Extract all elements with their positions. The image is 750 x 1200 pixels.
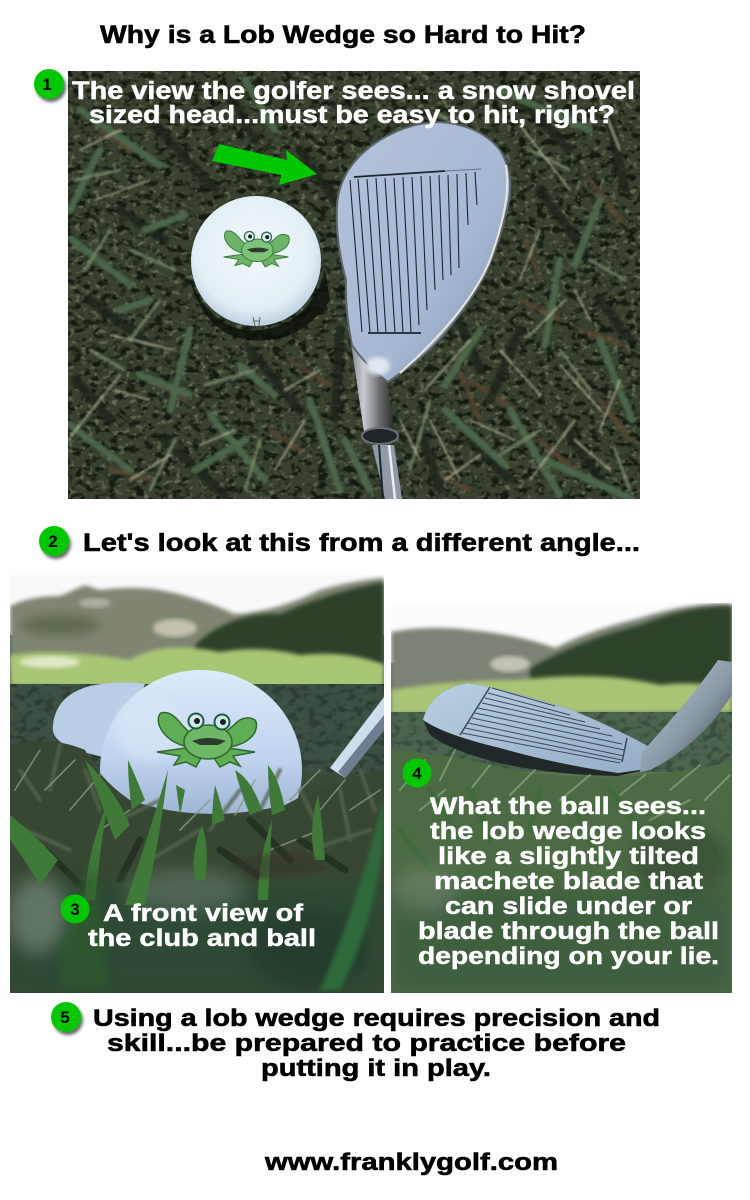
badge 2: [39, 526, 69, 556]
heading: different angle: Let's look at this from a different angle...: [83, 529, 640, 557]
badge 1: [34, 69, 64, 99]
frog logo: [224, 231, 289, 267]
sharp blades: [10, 760, 325, 905]
badge 5: 5: [60, 1008, 70, 1027]
frog logo: [157, 712, 256, 767]
text: closing advice: Using a lob wedge requires precision and: [93, 1005, 660, 1032]
badge 4: 4: [412, 764, 422, 783]
caption: what the ball sees: depending on your lie.: [418, 943, 719, 970]
caption: front view: A front view of: [103, 900, 304, 927]
sky and hills: [391, 603, 732, 772]
caption: what the ball sees: What the ball sees...: [430, 793, 706, 820]
panel: golfer view photo: [68, 71, 640, 499]
shaft: [372, 445, 402, 499]
badge 2: 2: [48, 532, 58, 551]
website url: www.franklygolf.com: [264, 1149, 558, 1176]
caption: what the ball sees: like a slightly tilted: [438, 843, 699, 870]
caption: golfer view: sized head...must be easy to hit, right?: [89, 101, 615, 129]
badge 5: [51, 1002, 81, 1032]
wedge head: [337, 122, 510, 382]
text: closing advice: [93, 1005, 660, 1082]
ball bottom marking: [253, 317, 260, 326]
text: closing advice: putting it in play.: [261, 1055, 491, 1082]
hosel: [640, 660, 732, 772]
foreground grass: [391, 750, 732, 993]
panel: ball's-eye view photo: [391, 603, 732, 993]
grass blades: [68, 80, 632, 498]
golf ball with frog logo: [190, 196, 330, 340]
golf ball with frog logo: [100, 670, 302, 814]
wedge head: [423, 660, 732, 776]
text: closing advice: skill...be prepared to practice before: [107, 1030, 626, 1057]
badge 1: 1: [42, 75, 52, 94]
foreground grass: [8, 741, 384, 993]
grooves: [350, 169, 481, 333]
blurred foreground: [10, 885, 384, 993]
caption: what the ball sees: [418, 793, 719, 970]
club head behind ball: [53, 682, 145, 760]
caption: golfer view: The view the golfer sees... a snow shovel: [72, 77, 635, 105]
caption: what the ball sees: blade through the ball: [418, 918, 719, 945]
panel: front view photo: [8, 575, 384, 993]
caption: what the ball sees: the lob wedge looks: [430, 818, 706, 845]
title: Why is a Lob Wedge so Hard to Hit?: [100, 21, 586, 49]
caption: front view: the club and ball: [88, 925, 316, 952]
sky and hills: [10, 575, 384, 774]
caption: what the ball sees: machete blade that: [434, 868, 703, 895]
hosel: [352, 346, 394, 432]
caption: golfer view: [72, 77, 635, 129]
badge 4: [402, 758, 432, 788]
caption: front view: [88, 900, 316, 952]
arrow: green arrow pointing to club: [212, 144, 317, 185]
caption: what the ball sees: can slide under or: [445, 893, 692, 920]
club shaft: [330, 697, 384, 778]
badge 3: 3: [70, 900, 80, 919]
badge 3: [60, 894, 90, 924]
